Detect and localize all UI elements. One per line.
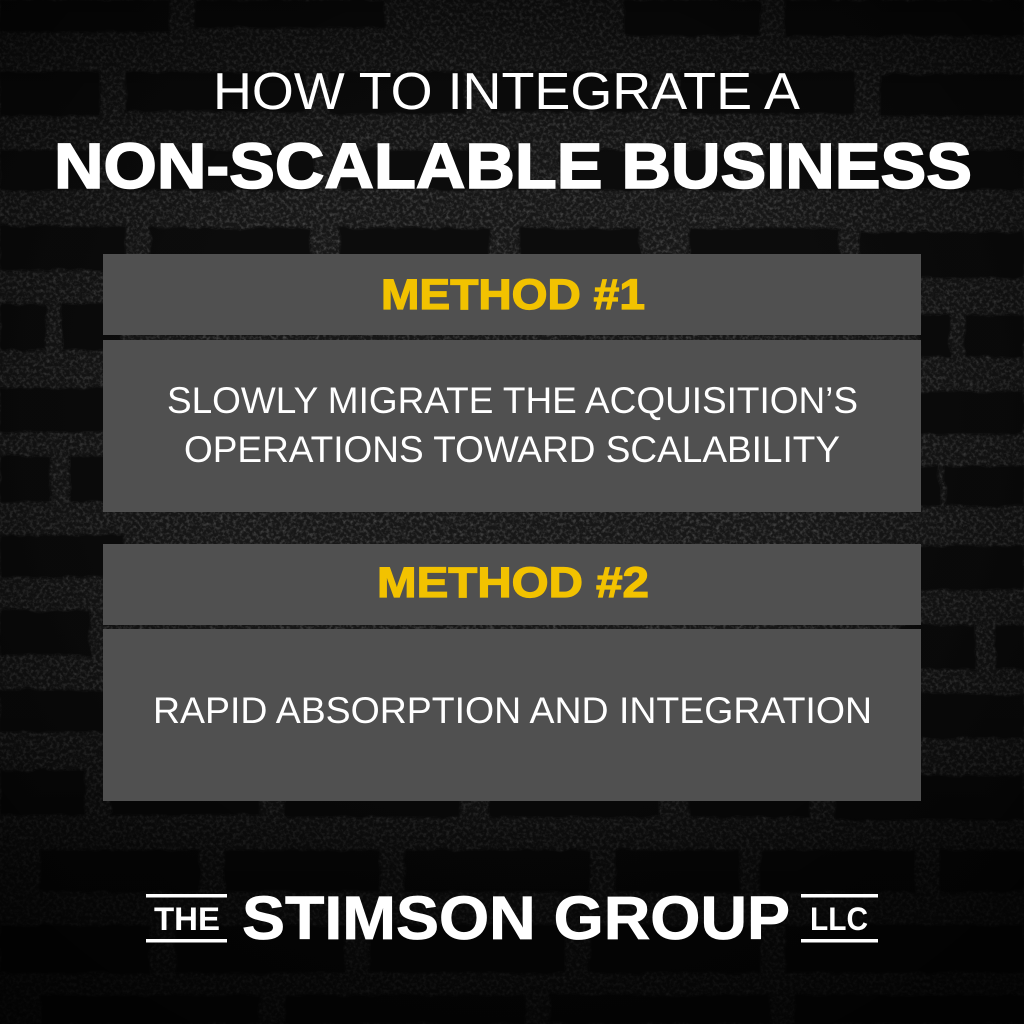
method 2 description (103, 629, 921, 801)
method 1 header bar (103, 254, 921, 335)
logo: LLC mark: LLC (810, 901, 868, 937)
logo: THE mark (146, 894, 227, 942)
method 1 description: SLOWLY MIGRATE THE ACQUISITION’S (167, 380, 858, 421)
logo: The Stimson Group LLC (146, 884, 878, 952)
logo: LLC mark (801, 894, 878, 942)
method 2 heading: METHOD #2 (377, 559, 649, 607)
panel: method 1 (103, 254, 921, 512)
title (54, 63, 972, 202)
title line 1: HOW TO INTEGRATE A (213, 63, 800, 121)
method 2 header bar (103, 544, 921, 625)
method 1 description (103, 340, 921, 512)
method 1 heading: METHOD #1 (381, 271, 645, 319)
logo: THE mark: THE (154, 901, 220, 937)
panel: method 2 (103, 544, 921, 801)
title line 2: NON-SCALABLE BUSINESS (54, 130, 972, 202)
logo: company name: STIMSON GROUP (242, 884, 790, 952)
method 1 description: OPERATIONS TOWARD SCALABILITY (184, 429, 840, 470)
method 2 description: RAPID ABSORPTION AND INTEGRATION (153, 690, 872, 731)
